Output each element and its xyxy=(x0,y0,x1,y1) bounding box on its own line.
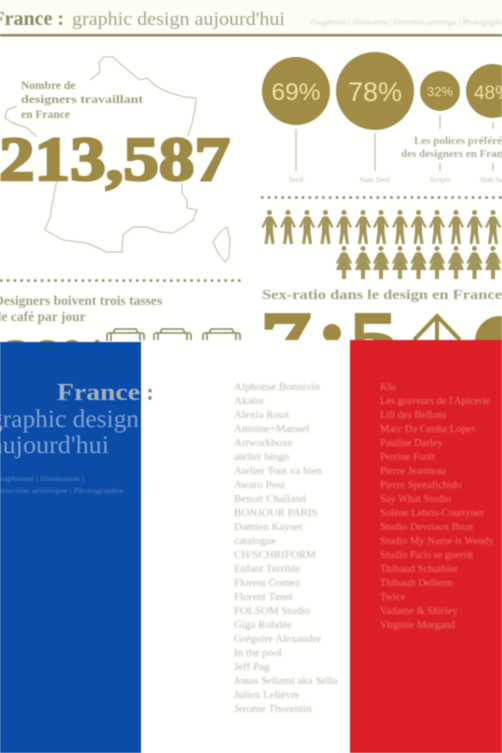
bubble: 69%: 69% xyxy=(271,79,321,106)
list of designers: white band: Enfant Terrible xyxy=(234,563,301,575)
pictogram: men xyxy=(262,210,501,244)
list of designers: white band: catalogue xyxy=(234,535,276,547)
icons: coffee cups xyxy=(107,329,240,341)
cover categories xyxy=(0,474,125,495)
list of designers: white band: FOLSOM Studio xyxy=(234,605,311,617)
list of designers: white band: Grégoire Alexandre xyxy=(234,633,321,645)
flag: white band xyxy=(141,340,350,753)
list of designers: white band: Atelier Tout va bien xyxy=(234,465,322,477)
list of designers: white band: Alphonse Bonnivin xyxy=(234,381,320,393)
bubble: 48% xyxy=(466,64,502,118)
list of designers: white band: Damien Kayser xyxy=(234,521,303,533)
big number: 213,587 xyxy=(0,126,230,194)
bubble: 32%: 32% xyxy=(427,84,453,99)
dotted divider right xyxy=(261,196,502,199)
list of designers: white band: Giga Rohdée xyxy=(234,619,292,631)
list of designers: red band: Pauline Darley xyxy=(380,438,443,449)
list of designers: white band: BONJOUR PARIS xyxy=(234,507,318,519)
list of designers: white band: In the pool xyxy=(234,647,282,659)
list of designers: red band: Marc Da Cunha Lopes xyxy=(380,424,475,435)
bubble: 78%: 78% xyxy=(348,77,402,107)
panel: French flag cover xyxy=(0,340,502,753)
list of designers: red band: Solène Lebris-Courtyner xyxy=(380,508,485,519)
list of designers: white band: Jonas Sellami aka Sella xyxy=(234,675,338,687)
chart labels xyxy=(289,175,502,184)
chart labels: Sans Serif xyxy=(360,175,391,184)
bubble: 78% xyxy=(336,52,414,130)
list of designers: red band: Thibaud Schuthier xyxy=(380,564,458,575)
map caption: Nombre de xyxy=(21,80,75,92)
list of designers: red band: Lili des Bellons xyxy=(380,410,446,421)
list of designers: white band: Julien Lelièvre xyxy=(234,689,300,701)
heading: sex ratio: Sex-ratio dans le design en France xyxy=(262,288,502,303)
list of designers: white band: Benoit Challand xyxy=(234,493,306,505)
dotted divider left xyxy=(0,279,242,282)
cover title: France xyxy=(57,380,140,406)
subtitle: graphic design: graphic design aujourd'hui xyxy=(72,9,285,30)
list of designers: white band: Jeff Pag xyxy=(234,661,270,673)
list of designers: red band xyxy=(380,382,495,631)
list of designers: red band: Les graveurs de l'Apicerie xyxy=(380,396,490,407)
chart labels: Scripts xyxy=(430,175,450,184)
list of designers: red band: Perrine Forêt xyxy=(380,452,435,463)
navigation categories: Graphisme | Illustration | Direction artistique | Photographie xyxy=(311,18,502,27)
fonts chart xyxy=(262,52,502,184)
header band xyxy=(0,0,502,36)
sex ratio figures: 7 xyxy=(261,298,311,378)
text: en France xyxy=(21,109,70,121)
list of designers: red band: Thibault Dellerm xyxy=(380,578,453,589)
list of designers: red band: Virginie Morgand xyxy=(380,620,456,631)
list of designers: red band: Say What Studio xyxy=(380,494,451,505)
chart labels: Serif xyxy=(289,175,304,184)
list of designers: red band: Pierre Spreafichido xyxy=(380,480,461,491)
list of designers: red band: Klu xyxy=(380,382,396,393)
list of designers: white band xyxy=(234,381,338,715)
flag: red band xyxy=(350,340,502,753)
list of designers: red band: Studio Devriaux Brun xyxy=(380,522,473,533)
bubble: 69% xyxy=(262,57,330,125)
cover title: : xyxy=(146,380,154,406)
text: designers travaillant xyxy=(21,94,143,106)
cover title xyxy=(0,380,154,459)
list of designers: white band: Akatre xyxy=(234,395,264,407)
list of designers: red band: Vadame & Shirley xyxy=(380,606,458,617)
list of designers: white band: Jerome Thorentin xyxy=(234,703,312,715)
sex ratio figures xyxy=(261,298,502,378)
arrow symbol xyxy=(414,316,460,345)
list of designers: red band: Twice xyxy=(380,592,406,603)
list of designers: red band: Pierre Jeanneau xyxy=(380,466,447,477)
bubble: 32% xyxy=(420,71,460,111)
pictogram: women xyxy=(336,246,501,279)
coffee percentage: 36% xyxy=(4,328,112,388)
map of France xyxy=(5,57,230,262)
flag: blue band xyxy=(0,342,141,753)
list of designers: white band: CH/SCHRIFORM xyxy=(234,549,316,561)
list of designers: red band: Studio Paris se guerrit xyxy=(380,550,473,561)
connector lines xyxy=(296,115,493,171)
sex ratio figures: 5 xyxy=(350,298,397,378)
list of designers: white band: Alexia Roux xyxy=(234,409,290,421)
list of designers: white band: Florent Gomez xyxy=(234,577,300,589)
list of designers: white band: Antoine+Manuel xyxy=(234,423,309,435)
list of designers: red band: Studio My Name is Wendy xyxy=(380,536,495,547)
list of designers: white band: Artworkboxe xyxy=(234,437,293,449)
list of designers: white band: Awaro Post xyxy=(234,479,285,491)
Corsica xyxy=(213,227,230,262)
list of designers: white band: atelier bingo xyxy=(234,451,290,463)
list of designers: white band: Florent Tanet xyxy=(234,591,293,603)
